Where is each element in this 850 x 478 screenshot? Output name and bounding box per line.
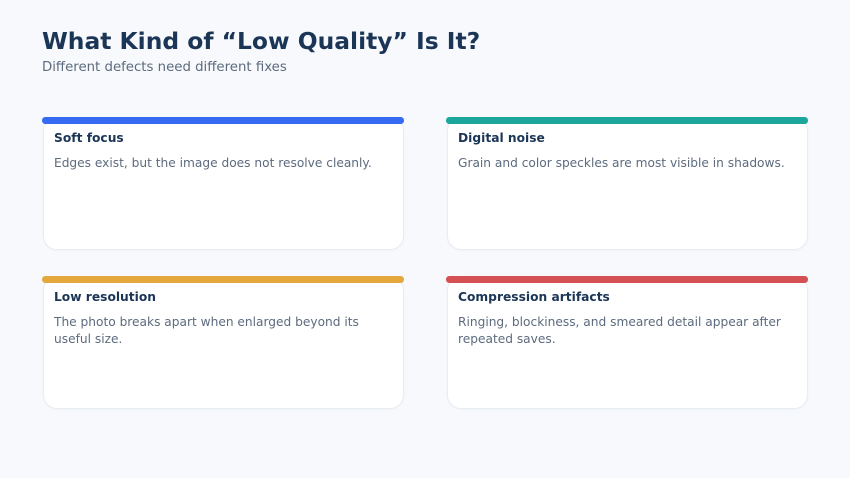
card background (447, 117, 808, 250)
accent bar: red (446, 276, 808, 282)
panel: digital noise (446, 117, 808, 250)
description: soft focus: Edges exist, but the image does not resolve cleanly. (54, 156, 372, 170)
heading: compression artifacts: Compression artifacts (458, 290, 610, 304)
title: What Kind of “Low Quality” Is It? (42, 26, 480, 54)
description: low resolution: The photo breaks apart when enlarged beyond its useful size. (54, 315, 359, 346)
panel: soft focus (42, 117, 404, 250)
description: compression artifacts: Ringing, blockiness, and smeared detail appear after repeated saves. (458, 315, 781, 346)
accent bar: teal (446, 117, 808, 124)
heading: low resolution: Low resolution (54, 290, 156, 304)
card background (43, 117, 404, 250)
description: digital noise: Grain and color speckles are most visible in shadows. (458, 156, 785, 170)
card background (447, 276, 808, 409)
accent bar: blue (42, 117, 404, 124)
panel: low resolution (42, 276, 404, 409)
heading: soft focus: Soft focus (54, 131, 124, 145)
subtitle: Different defects need different fixes (42, 60, 287, 75)
panel: compression artifacts (446, 276, 808, 409)
accent bar: amber (42, 276, 404, 282)
heading: digital noise: Digital noise (458, 131, 545, 145)
card background (43, 276, 404, 409)
